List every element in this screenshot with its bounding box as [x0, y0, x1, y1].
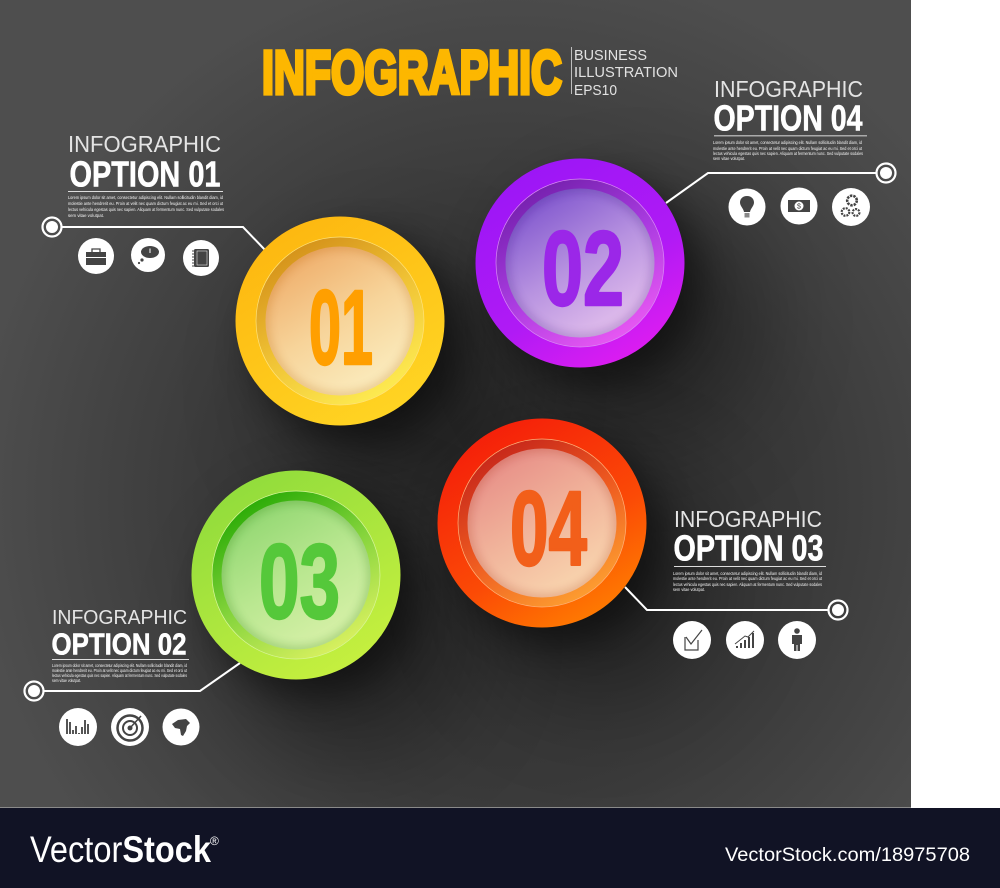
icon: bar chart: [59, 708, 97, 746]
connector: option 01: [42, 218, 266, 251]
panel: option 04 text: INFOGRAPHIC: [714, 76, 863, 102]
subtitle: [571, 47, 678, 99]
icon: light bulb: [728, 188, 766, 226]
icons: option 02: [59, 708, 200, 746]
number 02: 02: [542, 210, 624, 328]
panel: option 03 text: sem vitae volutpat.: [673, 587, 705, 592]
panel: option 04 text: molestie ante hendrerit eu. Proin at velit nec quam dictum feugiat ac eu mi. Sed et orci ut: [713, 146, 863, 151]
connector: option 02: [24, 663, 240, 700]
panel: option 02 text: Lorem ipsum dolor sit amet, consectetur adipiscing elit. Nullam sollicitudin blandit diam, id: [52, 663, 187, 668]
subtitle: BUSINESS: [574, 47, 647, 64]
icon: speech bubble: [131, 238, 165, 272]
panel: option 01 text: Lorem ipsum dolor sit amet, consectetur adipiscing elit. Nullam sollicitudin blandit diam, id: [68, 195, 223, 200]
panel: option 04 text: [713, 76, 867, 161]
panel: option 01 text: lectus vehicula egestas quis nec sapien. Aliquam at fermentum nunc. Sed vulputate sodales: [68, 207, 225, 212]
panel: option 01 text: [68, 131, 225, 218]
icon: person: [778, 621, 816, 659]
icon: gears: [832, 188, 870, 226]
connector: option 04: [666, 164, 896, 203]
panel: option 03 text: OPTION 03: [674, 528, 824, 568]
number 01: 01: [309, 269, 373, 387]
panel: option 01 text: OPTION 01: [70, 154, 220, 194]
panel: option 04 text: OPTION 04: [714, 98, 862, 138]
circle: 03 green: [192, 470, 400, 680]
footer url: VectorStock.com/18975708: [725, 845, 970, 866]
icon: banknote: $: [797, 204, 801, 210]
panel: option 02 text: molestie ante hendrerit eu. Proin at velit nec quam dictum feugiat ac eu mi. Sed et orci ut: [52, 668, 188, 673]
panel: option 03 text: Lorem ipsum dolor sit amet, consectetur adipiscing elit. Nullam sollicitudin blandit diam, id: [673, 571, 822, 576]
panel: option 02 text: INFOGRAPHIC: [52, 606, 187, 629]
circle: 02 purple: [476, 158, 684, 368]
icon: globe: [162, 708, 200, 746]
panel: option 02 text: lectus vehicula egestas quis nec sapien. Aliquam at fermentum nunc. Sed vulputate sodales: [52, 673, 187, 678]
panel: option 04 text: Lorem ipsum dolor sit amet, consectetur adipiscing elit. Nullam sollicitudin blandit diam, id: [713, 140, 862, 145]
panel: option 02 text: [52, 606, 189, 683]
connector: option 03: [625, 587, 848, 620]
title: INFOGRAPHIC: [262, 38, 562, 106]
panel: option 04 text: sem vitae volutpat.: [713, 156, 745, 161]
icons: option 04: [728, 188, 870, 226]
panel: option 01 text: INFOGRAPHIC: [68, 131, 221, 157]
footer logo: VectorStock: [30, 829, 211, 870]
icon: notebook: [183, 240, 219, 276]
icon: target: [111, 708, 149, 746]
panel: option 03 text: molestie ante hendrerit eu. Proin at velit nec quam dictum feugiat ac eu mi. Sed et orci ut: [673, 576, 823, 581]
registered mark: ®: [210, 834, 219, 848]
icons: option 03: [673, 621, 816, 659]
subtitle: ILLUSTRATION: [574, 64, 678, 81]
panel: option 01 text: sem vitae volutpat.: [68, 213, 104, 218]
icon: checkbox: [673, 621, 711, 659]
panel: option 03 text: [673, 506, 826, 592]
panel: option 03 text: lectus vehicula egestas quis nec sapien. Aliquam at fermentum nunc. Sed vulputate sodales: [673, 582, 823, 587]
icon: banknote: [780, 188, 818, 224]
number 04: 04: [510, 470, 587, 588]
panel: option 04 text: lectus vehicula egestas quis nec sapien. Aliquam at fermentum nunc. Sed vulputate sodales: [713, 151, 864, 156]
panel: option 02 text: OPTION 02: [52, 626, 186, 662]
panel: option 03 text: INFOGRAPHIC: [674, 506, 822, 532]
number 03: 03: [259, 523, 340, 641]
panel: option 02 text: sem vitae volutpat.: [52, 678, 81, 683]
icon: growth chart: [726, 621, 764, 659]
circle shadows: [208, 176, 755, 750]
circle: 04 red: [438, 418, 646, 628]
circle: 01 yellow: [236, 216, 444, 426]
footer bar: [0, 808, 1000, 888]
subtitle: EPS10: [574, 82, 617, 99]
panel: option 01 text: molestie ante hendrerit eu. Proin at velit nec quam dictum feugiat ac eu mi. Sed et orci ut: [68, 201, 224, 206]
icon: briefcase: [78, 238, 114, 274]
icons: option 01: [78, 238, 219, 276]
